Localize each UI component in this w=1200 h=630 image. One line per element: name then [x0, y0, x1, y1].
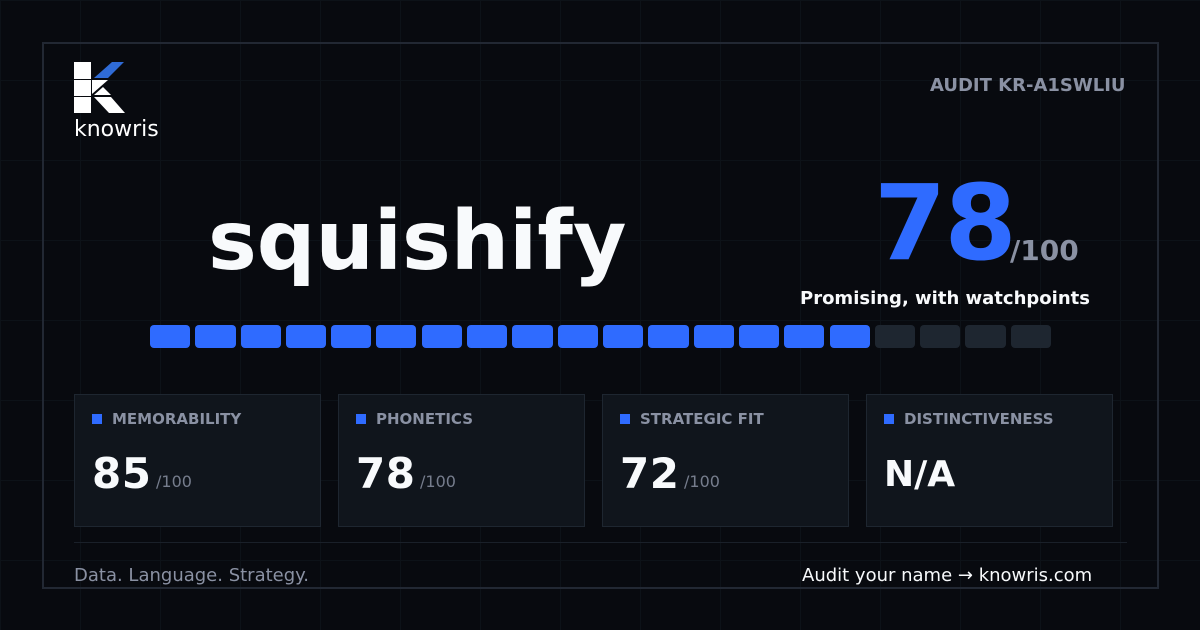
- score denominator: /100: [1010, 234, 1079, 267]
- name title: squishify: [208, 194, 626, 289]
- overall score: 78: [874, 162, 1015, 284]
- card: strategic fit: [602, 394, 849, 527]
- progress bar: [150, 325, 1051, 348]
- verdict: Promising, with watchpoints: [800, 288, 1090, 309]
- logo: [74, 62, 159, 142]
- card: phonetics: /100: [420, 472, 456, 491]
- tagline: Data. Language. Strategy.: [74, 565, 309, 586]
- card: distinctiveness: DISTINCTIVENESS: [904, 410, 1054, 428]
- audit id: AUDIT KR-A1SWLIU: [930, 75, 1126, 96]
- card: memorability: MEMORABILITY: [112, 410, 241, 428]
- card: memorability: /100: [156, 472, 192, 491]
- call to action: Audit your name → knowris.com: [802, 565, 1092, 586]
- overall score: [874, 162, 1079, 284]
- card: memorability: 85: [92, 449, 151, 498]
- card: strategic fit: 72: [620, 449, 679, 498]
- card: strategic fit: /100: [684, 472, 720, 491]
- card: phonetics: 78: [356, 449, 415, 498]
- logo wordmark: knowris: [74, 117, 159, 142]
- card: distinctiveness: [866, 394, 1113, 527]
- card: memorability: [74, 394, 321, 527]
- card: distinctiveness: N/A: [884, 454, 955, 495]
- card: phonetics: PHONETICS: [376, 410, 473, 428]
- card: strategic fit: STRATEGIC FIT: [640, 410, 764, 428]
- card: phonetics: [338, 394, 585, 527]
